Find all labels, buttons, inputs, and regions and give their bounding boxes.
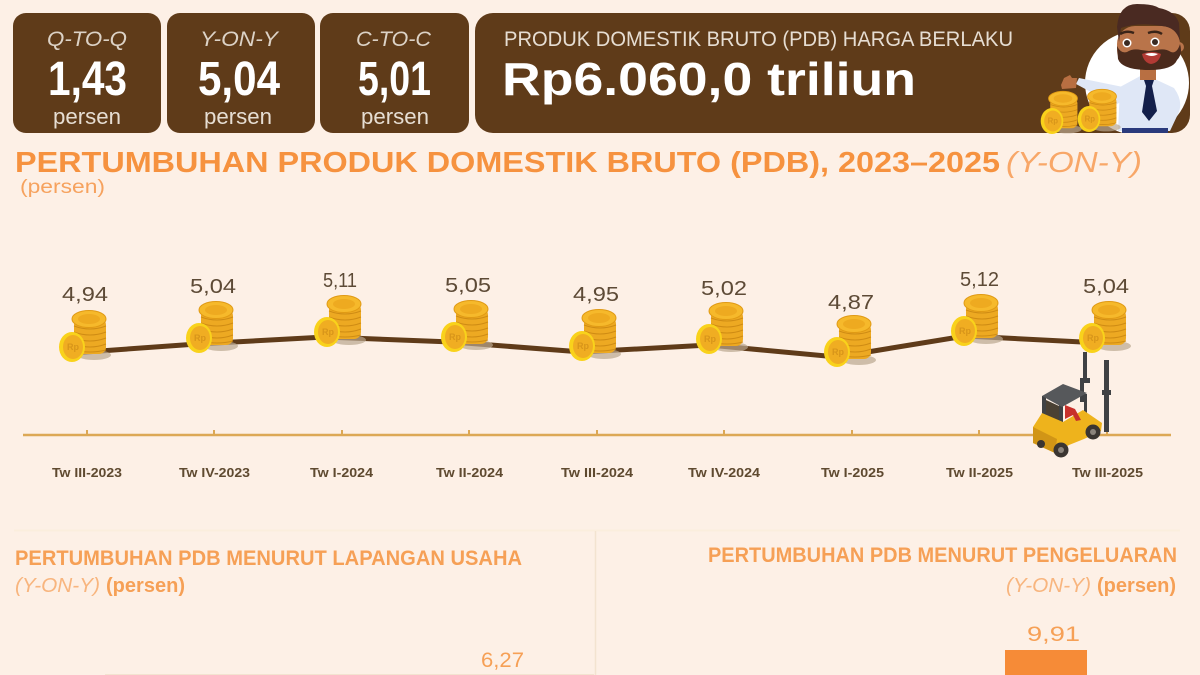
value labels: 5,02 <box>701 278 747 300</box>
panel: q-to-q: Q-TO-Q <box>47 28 127 51</box>
coin markers <box>59 294 1131 367</box>
icon: forklift <box>1033 352 1111 458</box>
panel: c-to-c: persen <box>361 104 429 129</box>
value labels: 4,95 <box>573 284 619 306</box>
panel: nominal GDP <box>475 13 1190 133</box>
axis labels <box>52 465 1143 480</box>
title: PERTUMBUHAN PRODUK DOMESTIK BRUTO (PDB), 2023–2025 <box>15 147 1000 179</box>
value labels: 4,87 <box>828 292 874 314</box>
value labels <box>62 269 1129 314</box>
value labels: 5,04 <box>1083 276 1129 298</box>
unit label: (persen) <box>20 177 105 198</box>
axis labels: Tw I-2025 <box>821 465 884 480</box>
value labels: 4,94 <box>62 284 108 306</box>
panel: q-to-q <box>13 13 161 133</box>
panel: y-on-y: 5,04 <box>198 53 280 106</box>
panel: y-on-y <box>167 13 315 133</box>
panel: y-on-y: Y-ON-Y <box>200 28 280 51</box>
heading: PERTUMBUHAN PDB MENURUT PENGELUARAN <box>708 544 1177 567</box>
trend line <box>72 336 1082 357</box>
unit: (persen) <box>106 575 185 597</box>
axis labels: Tw I-2024 <box>310 465 374 480</box>
subheading: (Y-ON-Y) <box>15 575 100 597</box>
heading: PDB harga berlaku: PRODUK DOMESTIK BRUTO (PDB) HARGA BERLAKU <box>504 28 1013 51</box>
axis labels: Tw II-2024 <box>436 465 504 480</box>
axis labels: Tw IV-2024 <box>688 465 761 480</box>
value: 9,91 <box>1027 623 1080 646</box>
title suffix: (Y-ON-Y) <box>1006 147 1142 179</box>
divider <box>14 530 1180 532</box>
value labels: 5,05 <box>445 275 491 297</box>
axis labels: Tw IV-2023 <box>179 465 250 480</box>
value labels: 5,04 <box>190 276 236 298</box>
panel: q-to-q: 1,43 <box>48 53 127 106</box>
panel: c-to-c: 5,01 <box>358 53 431 106</box>
panel: y-on-y: persen <box>204 104 272 129</box>
bar <box>1005 650 1087 675</box>
panel: by expenditure <box>708 544 1177 675</box>
panel: by industry <box>15 547 594 674</box>
panel: c-to-c: C-TO-C <box>356 28 432 51</box>
panel: q-to-q: persen <box>53 104 121 129</box>
heading: PERTUMBUHAN PDB MENURUT LAPANGAN USAHA <box>15 547 522 570</box>
value labels: 5,12 <box>960 269 999 291</box>
panel: c-to-c <box>320 13 469 133</box>
subheading: (Y-ON-Y) <box>1006 575 1091 597</box>
icon: businessman with coins <box>1041 4 1189 135</box>
value: 6,27 <box>481 649 524 672</box>
axis labels: Tw III-2024 <box>561 465 634 480</box>
line chart: PDB growth <box>23 269 1171 480</box>
unit: (persen) <box>1097 575 1176 597</box>
axis labels: Tw III-2023 <box>52 465 122 480</box>
value: nominal GDP: Rp6.060,0 triliun <box>502 53 916 105</box>
axis labels: Tw III-2025 <box>1072 465 1143 480</box>
axis <box>23 434 1171 436</box>
value labels: 5,11 <box>323 270 357 292</box>
axis labels: Tw II-2025 <box>946 465 1013 480</box>
